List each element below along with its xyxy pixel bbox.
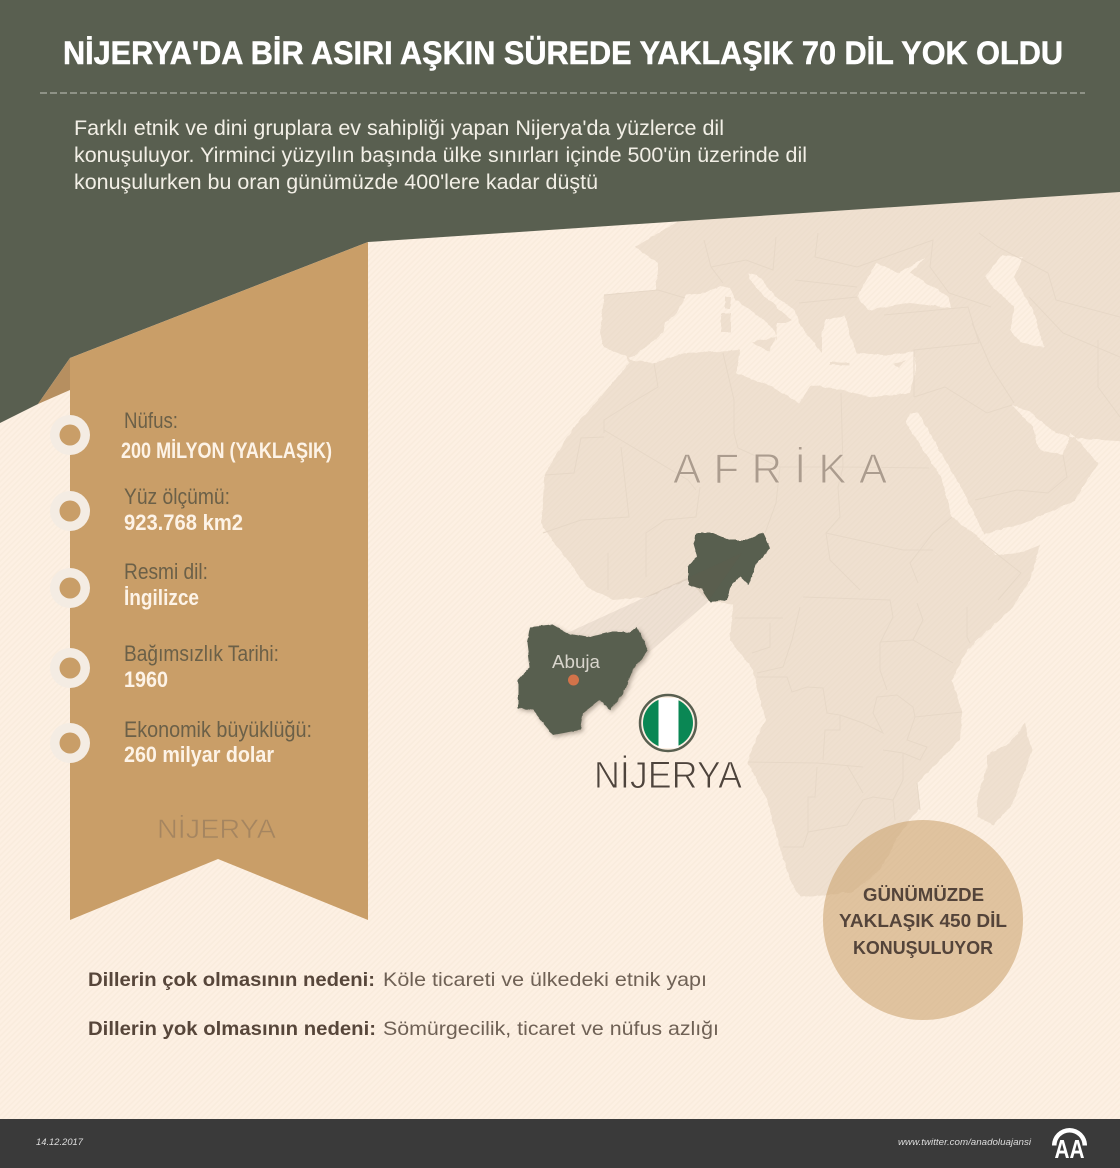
country name: NİJERYA (594, 754, 743, 797)
date: 14.12.2017 (36, 1137, 84, 1148)
ring bullet 5 (50, 723, 90, 763)
callout: languages spoken today (823, 820, 1023, 1020)
ring bullet 2 (50, 491, 90, 531)
fact: independence: Bağımsızlık Tarihi: (124, 641, 279, 666)
ring bullet 4 (50, 648, 90, 688)
footer bar (0, 1119, 1120, 1168)
title: NİJERYA'DA BİR ASIRI AŞKIN SÜREDE YAKLAŞIK 70 DİL YOK OLDU (63, 35, 1063, 71)
small Nigeria highlighted on map (688, 533, 770, 602)
fact: economy (124, 717, 312, 767)
ribbon fold (38, 358, 70, 404)
fact: independence: 1960 (124, 667, 168, 692)
callout: languages spoken today: GÜNÜMÜZDE (863, 884, 984, 905)
text: reason for many languages: Dillerin çok olmasının nedeni: (88, 969, 375, 991)
fact: economy: Ekonomik büyüklüğü: (124, 717, 312, 742)
social link: www.twitter.com/anadoluajansi (898, 1137, 1032, 1148)
ribbon country name: NİJERYA (157, 813, 276, 844)
fact: official language (124, 559, 208, 610)
map: Africa, Europe and Middle East (541, 170, 1120, 897)
icon: AA logo: AA (1054, 1134, 1085, 1164)
intro text (74, 117, 807, 194)
fact: area: 923.768 km2 (124, 510, 243, 535)
text: reason for many languages: Köle ticareti ve ülkedeki etnik yapı (383, 969, 707, 991)
continent label: AFRİKA (673, 445, 887, 492)
fact: area (124, 484, 243, 535)
icon: AA logo (1052, 1128, 1087, 1164)
ring bullet 1 (50, 415, 90, 455)
enlarged Nigeria map (518, 625, 648, 735)
fact: independence (124, 641, 279, 692)
intro text: konuşulurken bu oran günümüzde 400'lere kadar düştü (74, 171, 598, 194)
fact: official language: İngilizce (124, 585, 199, 610)
icon: Nigerian flag (640, 695, 696, 751)
intro text: Farklı etnik ve dini gruplara ev sahipliği yapan Nijerya'da yüzlerce dil (74, 117, 724, 140)
callout: languages spoken today: YAKLAŞIK 450 DİL (839, 910, 1007, 931)
country borders (543, 233, 1120, 847)
callout: languages spoken today: KONUŞULUYOR (853, 937, 993, 958)
text: reason for lost languages: Sömürgecilik, ticaret ve nüfus azlığı (383, 1018, 719, 1040)
text: reason for lost languages (88, 1018, 719, 1040)
text: reason for lost languages: Dillerin yok olmasının nedeni: (88, 1018, 376, 1040)
fact: economy: 260 milyar dolar (124, 742, 274, 767)
fact: population (121, 408, 332, 463)
fact: population: 200 MİLYON (YAKLAŞIK) (121, 438, 332, 463)
header band (0, 0, 1120, 423)
fact: area: Yüz ölçümü: (124, 484, 230, 509)
ribbon panel: country facts (50, 242, 368, 920)
capital label: Abuja (552, 652, 601, 672)
projection beam from map to enlarged Nigeria (567, 553, 742, 653)
fact: official language: Resmi dil: (124, 559, 208, 584)
text: reason for many languages (88, 969, 707, 991)
ring bullet 3 (50, 568, 90, 608)
intro text: konuşuluyor. Yirminci yüzyılın başında ülke sınırları içinde 500'ün üzerinde dil (74, 144, 807, 167)
fact: population: Nüfus: (124, 408, 178, 433)
capital marker (568, 674, 579, 686)
